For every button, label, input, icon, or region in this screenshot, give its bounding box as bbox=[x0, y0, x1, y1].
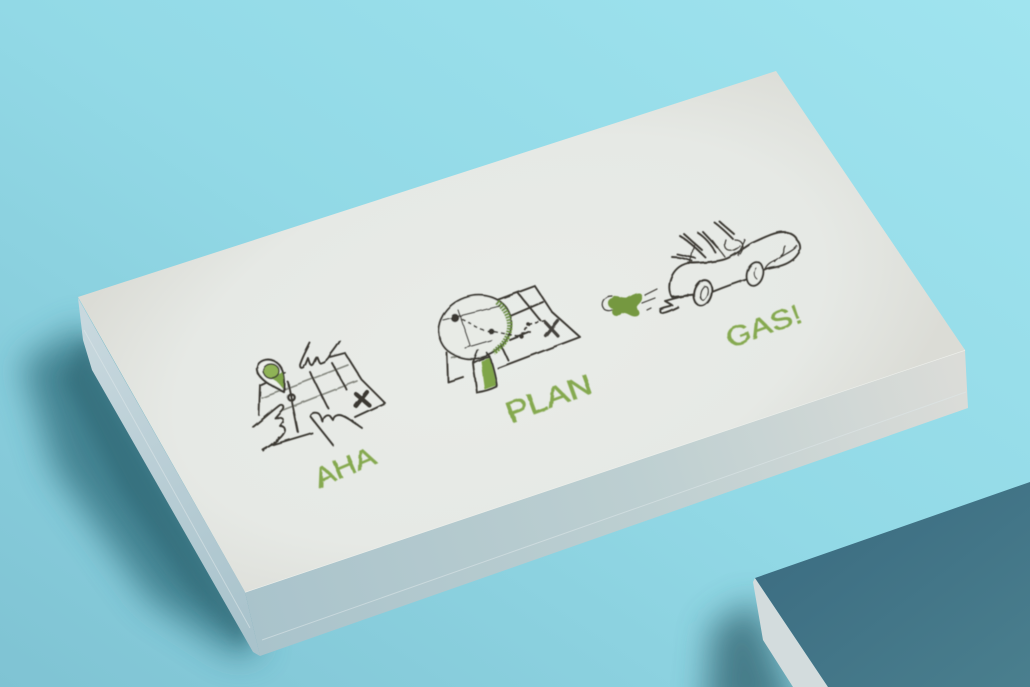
card stack bbox=[78, 71, 968, 656]
passengers bbox=[672, 222, 734, 261]
blue box bbox=[753, 482, 1030, 687]
map pin bbox=[257, 360, 284, 392]
car front details bbox=[765, 246, 797, 270]
car body bbox=[669, 232, 800, 297]
box side bbox=[753, 578, 828, 687]
rear bumper bbox=[660, 295, 688, 313]
route points bbox=[451, 314, 459, 322]
card top face bbox=[78, 71, 965, 592]
magnifier handle bbox=[473, 350, 490, 362]
icon: convertible car bbox=[660, 222, 800, 313]
stack left side bbox=[78, 298, 260, 656]
stack front side bbox=[245, 350, 968, 656]
plan x mark bbox=[545, 321, 558, 336]
label: PLAN: PLAN bbox=[501, 369, 597, 430]
label: GAS!: GAS! bbox=[722, 299, 805, 354]
label: AHA: AHA bbox=[310, 441, 380, 494]
rear wheel bbox=[691, 278, 715, 308]
front wheel bbox=[744, 260, 766, 288]
lens map detail bbox=[443, 306, 500, 348]
magnifier rim bbox=[430, 285, 520, 369]
x mark bbox=[356, 392, 369, 406]
map dot bbox=[288, 394, 294, 400]
top hand bbox=[300, 341, 340, 368]
map outline bbox=[259, 353, 385, 417]
icon: exhaust cloud bbox=[602, 289, 657, 316]
icon: magnifier over map bbox=[430, 285, 580, 393]
left hand bbox=[253, 405, 312, 450]
box top face bbox=[755, 482, 1030, 687]
route dashes bbox=[455, 318, 545, 337]
shadow of blue box bbox=[705, 600, 800, 687]
shadow of card stack bbox=[22, 325, 262, 655]
map outline and grid bbox=[447, 286, 580, 382]
map grid bbox=[262, 365, 357, 410]
icon: map with pin and hands bbox=[253, 341, 385, 452]
right hand bbox=[310, 413, 362, 445]
